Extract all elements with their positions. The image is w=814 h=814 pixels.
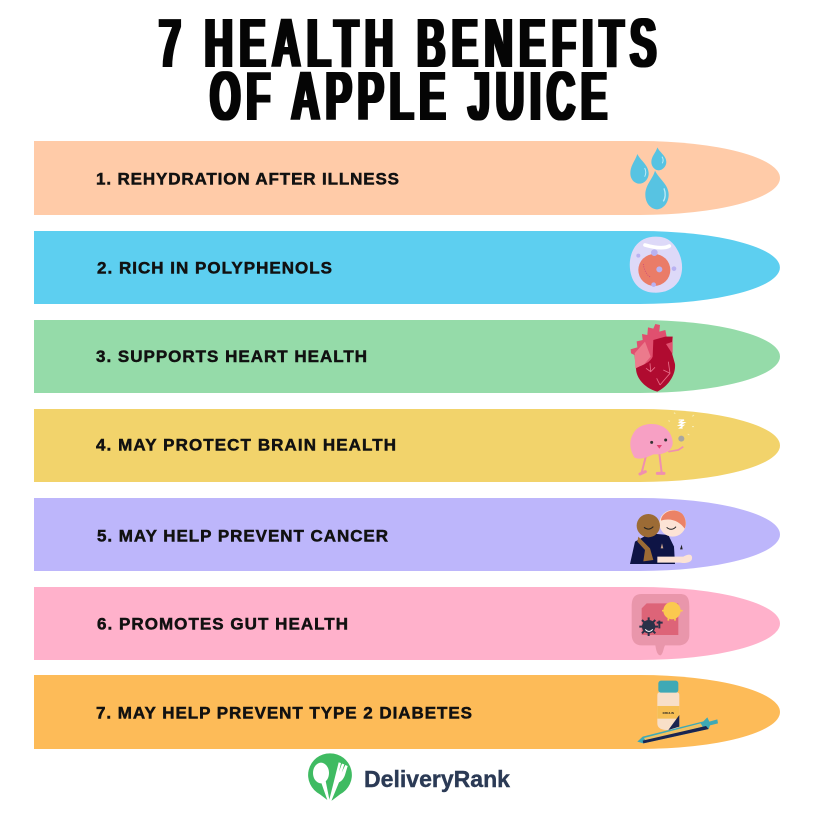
panel: supports heart health (34, 320, 780, 393)
icon: gut with bacteria (632, 594, 689, 655)
icon: spoon and fork badge (308, 753, 352, 801)
panel: rehydration after illness: 1. REHYDRATION AFTER ILLNESS (96, 170, 399, 188)
panel: may help prevent type 2 diabetes: 7. MAY HELP PREVENT TYPE 2 DIABETES (96, 704, 472, 722)
logo: DeliveryRank (308, 753, 511, 801)
panel: may help prevent type 2 diabetes (34, 675, 780, 749)
logo: DeliveryRank: DeliveryRank (364, 766, 511, 792)
title: OF APPLE JUICE (210, 58, 607, 136)
icon: insulin vial and syringe: INSULIN (663, 711, 674, 715)
icon: insulin vial and syringe (637, 681, 718, 743)
icon: cell (630, 237, 682, 293)
panel: promotes gut health: 6. PROMOTES GUT HEALTH (97, 614, 348, 634)
panel: may protect brain health (34, 409, 780, 482)
panel: may help prevent cancer: 5. MAY HELP PREVENT CANCER (97, 526, 388, 546)
panel: rich in polyphenols (34, 231, 780, 304)
icon: water drops (630, 147, 669, 209)
icon: two friends hugging (630, 510, 692, 564)
icon: heart (631, 324, 675, 392)
panel: may help prevent cancer (34, 498, 780, 571)
panel: rich in polyphenols: 2. RICH IN POLYPHENOLS (97, 258, 332, 278)
title (159, 5, 656, 136)
panel: may protect brain health: 4. MAY PROTECT BRAIN HEALTH (96, 436, 396, 454)
title: 7 HEALTH BENEFITS (159, 5, 656, 83)
panel: promotes gut health (34, 587, 780, 660)
panel: supports heart health: 3. SUPPORTS HEART HEALTH (96, 347, 367, 366)
panel: rehydration after illness (34, 141, 780, 215)
icon: brain with light bulb (630, 413, 694, 474)
